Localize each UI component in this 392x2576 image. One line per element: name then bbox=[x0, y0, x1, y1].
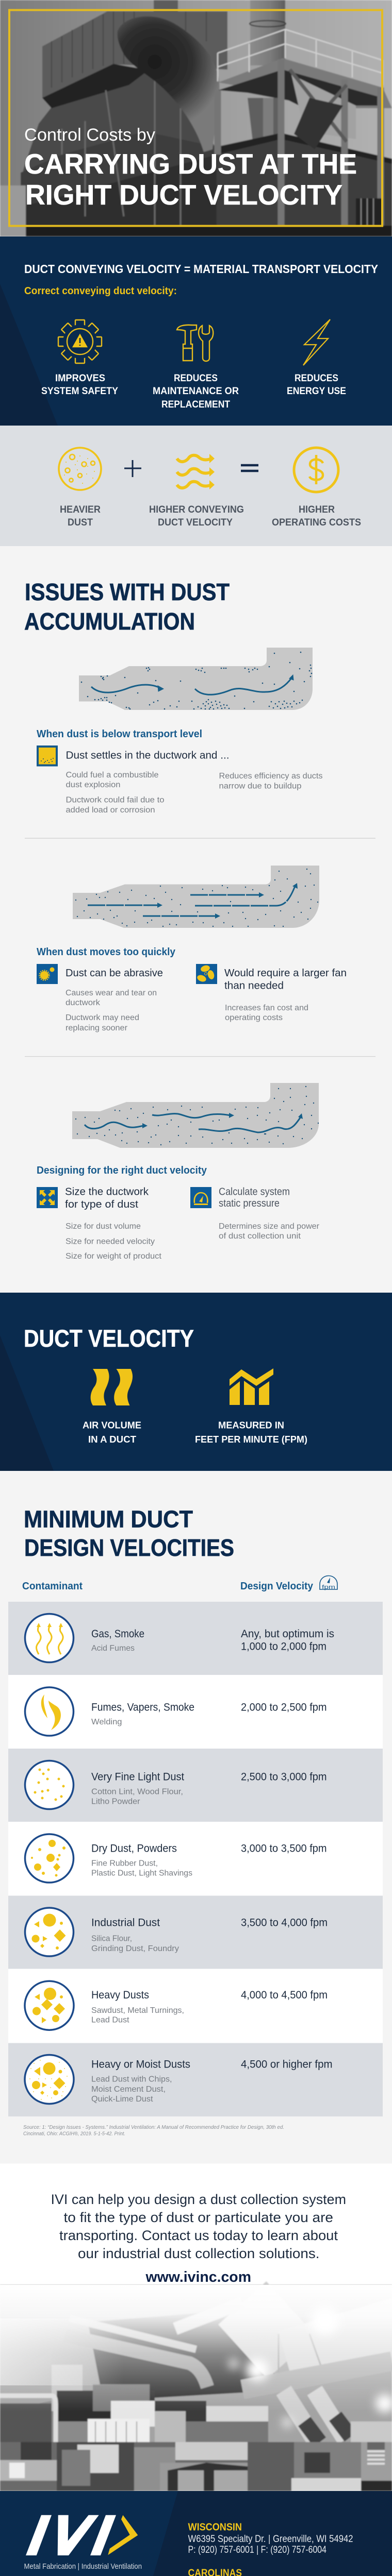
velocity value: 3,500 to 4,000 fpm bbox=[241, 1917, 328, 1929]
icon: lightning bolt bbox=[303, 319, 330, 365]
table row: gas, smoke bbox=[8, 1602, 383, 1675]
label: reduces energy use bbox=[287, 372, 346, 397]
hero yellow frame bbox=[9, 10, 382, 226]
heading: issues with dust accumulation: ISSUES WITH DUST bbox=[25, 579, 230, 605]
label: improves system safety: SYSTEM SAFETY bbox=[41, 385, 118, 397]
text: settled dust consequences left: Could fuel a combustible bbox=[66, 771, 159, 779]
address: Wisconsin: P: (920) 757-6001 | F: (920) 757-6004 bbox=[188, 2545, 326, 2555]
label: air volume: AIR VOLUME bbox=[83, 1420, 141, 1430]
text: examples: Fine Rubber Dust, bbox=[91, 1859, 158, 1868]
text: abrasive consequences: ductwork bbox=[66, 998, 100, 1007]
icon: dry dust bbox=[25, 1834, 73, 1883]
text: determines size: of dust collection unit bbox=[219, 1232, 301, 1241]
icon: rising chart bbox=[230, 1368, 273, 1405]
heading: duct velocity: DUCT VELOCITY bbox=[24, 1325, 194, 1352]
text: dust can be abrasive: Dust can be abrasive bbox=[66, 968, 163, 979]
heading: minimum duct design velocities bbox=[24, 1505, 234, 1561]
panel: footer bbox=[0, 2491, 392, 2576]
label: reduces maintenance: REPLACEMENT bbox=[161, 399, 230, 410]
subtitle: Control Costs by bbox=[24, 125, 155, 145]
text: examples: Grinding Dust, Foundry bbox=[91, 1944, 179, 1953]
label: higher conveying duct velocity bbox=[149, 504, 244, 528]
label: measured in fpm bbox=[195, 1420, 307, 1445]
address: Wisconsin: WISCONSIN bbox=[188, 2521, 242, 2533]
footer photo: factory ductwork bbox=[0, 2285, 392, 2491]
text: fan consequences: Increases fan cost and bbox=[225, 1004, 308, 1012]
panel: white call to action background bbox=[0, 2164, 392, 2287]
text: larger fan: Would require a larger fan bbox=[224, 968, 347, 979]
text: settled dust consequences right: Reduces efficiency as ducts bbox=[219, 772, 323, 781]
hero title bbox=[24, 125, 357, 211]
label: measured in fpm: FEET PER MINUTE (FPM) bbox=[195, 1434, 307, 1445]
label: air volume: IN A DUCT bbox=[88, 1434, 137, 1445]
text: dry dust, powders: Dry Dust, Powders bbox=[91, 1842, 177, 1855]
velocity value: 3,000 to 3,500 fpm bbox=[241, 1842, 327, 1855]
text: size the ductwork: for type of dust bbox=[65, 1199, 138, 1210]
table row: industrial dust bbox=[8, 1896, 383, 1969]
hero photo: baghouse dust collector bbox=[0, 0, 392, 236]
text: examples: Silica Flour, bbox=[91, 1934, 132, 1943]
call to action text: IVI can help you design a dust collection system bbox=[51, 2192, 346, 2207]
icon: moist dust bbox=[25, 2055, 74, 2104]
label: reduces energy use: ENERGY USE bbox=[287, 385, 346, 397]
text: heavy or moist dusts: Heavy or Moist Dusts bbox=[91, 2059, 190, 2070]
text: settled dust consequences left bbox=[66, 771, 164, 815]
icon: expand arrows bbox=[37, 1187, 58, 1208]
text: abrasive consequences: Causes wear and tear on bbox=[66, 989, 157, 997]
label: reduces maintenance: REDUCES bbox=[174, 372, 218, 384]
text: examples: Lead Dust with Chips, bbox=[91, 2075, 172, 2083]
velocity value: 4,000 to 4,500 fpm bbox=[241, 1989, 328, 2001]
subheading: moves too quickly: When dust moves too quickly bbox=[37, 946, 176, 958]
text: calculate system static pressure: static pressure bbox=[219, 1198, 280, 1209]
heading: issues with dust accumulation: ACCUMULATION bbox=[24, 608, 195, 635]
text: size the ductwork bbox=[65, 1186, 149, 1210]
icon: industrial dust bbox=[25, 1908, 73, 1956]
title line 2: RIGHT DUCT VELOCITY bbox=[25, 179, 342, 211]
heading: issues with dust accumulation bbox=[24, 579, 230, 635]
plus sign bbox=[124, 460, 141, 477]
text: acid fumes: Acid Fumes bbox=[91, 1644, 135, 1653]
icon: pressure gauge bbox=[190, 1187, 211, 1208]
icon: settled dust bbox=[38, 747, 57, 766]
subheading: right duct velocity: Designing for the right duct velocity bbox=[37, 1164, 207, 1176]
text: fumes, vapers, smoke: Fumes, Vapers, Smoke bbox=[91, 1701, 194, 1714]
label: higher operating costs: HIGHER bbox=[299, 504, 335, 515]
panel: heavier dust equation bbox=[0, 426, 392, 546]
call to action text: to fit the type of dust or particulate you are bbox=[64, 2210, 333, 2225]
text: examples: Litho Powder bbox=[91, 1797, 140, 1806]
text: abrasive consequences: Ductwork may need bbox=[66, 1013, 139, 1022]
subheading: below transport level: When dust is below transport level bbox=[37, 728, 202, 740]
label: heavier dust bbox=[60, 504, 101, 528]
diagram: duct with right velocity bbox=[72, 1083, 319, 1148]
subheading: Correct conveying duct velocity: bbox=[24, 285, 177, 297]
text: examples: Cotton Lint, Wood Flour, bbox=[91, 1788, 183, 1796]
text: determines size: Determines size and power bbox=[219, 1222, 319, 1231]
text: heavy dusts: Heavy Dusts bbox=[91, 1989, 149, 2001]
source note: Cincinnati, Ohio: ACGIH®, 2019. 5-1-5-42. Print. bbox=[23, 2131, 125, 2137]
text: sizing list: Size for needed velocity bbox=[66, 1238, 155, 1246]
text: settled dust consequences right: narrow due to buildup bbox=[219, 782, 301, 790]
text: size the ductwork: Size the ductwork bbox=[65, 1186, 149, 1197]
label: reduces energy use: REDUCES bbox=[295, 372, 338, 384]
velocity value: 2,000 to 2,500 fpm bbox=[241, 1701, 327, 1714]
text: examples bbox=[91, 2006, 184, 2025]
icon: wavy arrows bbox=[177, 454, 215, 489]
text: determines size bbox=[219, 1222, 319, 1241]
label: heavier dust: HEAVIER bbox=[60, 504, 101, 515]
icon: fan bbox=[196, 964, 217, 984]
table header: design velocity: Design Velocity bbox=[240, 1581, 314, 1592]
icon: air bands bbox=[91, 1369, 133, 1405]
heading: minimum duct design velocities: DESIGN VELOCITIES bbox=[24, 1534, 234, 1561]
label: heavier dust: DUST bbox=[68, 517, 93, 528]
text: dust settles: Dust settles in the ductwork and ... bbox=[66, 750, 229, 761]
label: higher operating costs: OPERATING COSTS bbox=[272, 517, 361, 528]
label: air volume bbox=[83, 1420, 141, 1445]
icon: fume wisp bbox=[25, 1687, 73, 1736]
text: sizing list bbox=[66, 1222, 162, 1261]
text: settled dust consequences right bbox=[219, 772, 323, 790]
text: examples bbox=[91, 1788, 183, 1806]
label: reduces maintenance bbox=[153, 372, 239, 410]
text: examples: Sawdust, Metal Turnings, bbox=[91, 2006, 184, 2015]
logo: IVI bbox=[26, 2515, 138, 2555]
text: examples bbox=[91, 1934, 179, 1953]
source note bbox=[23, 2124, 284, 2137]
text: examples: Plastic Dust, Light Shavings bbox=[91, 1869, 192, 1877]
label: reduces maintenance: MAINTENANCE OR bbox=[153, 385, 239, 397]
diagram: duct with settling dust bbox=[79, 648, 313, 710]
velocity value bbox=[241, 1628, 334, 1653]
text: calculate system static pressure: Calculate system bbox=[219, 1186, 290, 1197]
icon: gear with warning bbox=[58, 320, 102, 363]
label: improves system safety: IMPROVES bbox=[55, 372, 105, 384]
text: very fine light dust: Very Fine Light Dust bbox=[91, 1771, 184, 1783]
text: examples: Quick-Lime Dust bbox=[91, 2095, 153, 2104]
text: welding: Welding bbox=[91, 1718, 122, 1726]
table row: dry dust, powders bbox=[8, 1822, 383, 1896]
icon: fine dust bbox=[25, 1761, 73, 1809]
text: examples bbox=[91, 2075, 172, 2104]
velocity value: 2,500 to 3,000 fpm bbox=[241, 1771, 327, 1783]
text: larger fan bbox=[224, 968, 347, 991]
text: fan consequences bbox=[225, 1004, 308, 1022]
logo tagline: Metal Fabrication | Industrial Ventilation bbox=[24, 2563, 142, 2571]
text: larger fan: than needed bbox=[224, 980, 284, 991]
panel: conveying velocity bbox=[0, 236, 392, 426]
label: higher operating costs bbox=[272, 504, 361, 528]
text: examples bbox=[91, 1859, 192, 1877]
velocity value: 4,500 or higher fpm bbox=[241, 2059, 332, 2070]
title line 1: CARRYING DUST AT THE bbox=[24, 148, 357, 180]
text: examples: Moist Cement Dust, bbox=[91, 2085, 166, 2094]
diagram: duct with fast dust bbox=[73, 866, 319, 928]
label: improves system safety bbox=[41, 372, 118, 397]
website address: www.ivinc.com bbox=[145, 2269, 251, 2285]
velocity value: Any, but optimum is bbox=[241, 1628, 334, 1640]
equals sign bbox=[241, 465, 258, 471]
call to action text: transporting. Contact us today to learn about bbox=[59, 2228, 338, 2243]
text: sizing list: Size for weight of product bbox=[66, 1252, 162, 1261]
table row: very fine light dust bbox=[8, 1749, 383, 1822]
icon: dollar coin bbox=[294, 448, 338, 492]
text: settled dust consequences left: added load or corrosion bbox=[66, 806, 155, 815]
table row: heavy dusts bbox=[8, 1969, 383, 2043]
call to action text: our industrial dust collection solutions. bbox=[78, 2246, 320, 2261]
call to action text bbox=[51, 2192, 346, 2261]
text: industrial dust: Industrial Dust bbox=[91, 1917, 160, 1929]
text: sizing list: Size for dust volume bbox=[66, 1222, 141, 1231]
table row: heavy or moist dusts bbox=[8, 2043, 383, 2116]
text: abrasive consequences bbox=[66, 989, 157, 1032]
heading: minimum duct design velocities: MINIMUM DUCT bbox=[24, 1505, 193, 1532]
text: gas, smoke: Gas, Smoke bbox=[91, 1628, 144, 1640]
text: settled dust consequences left: dust explosion bbox=[66, 781, 121, 789]
velocity value: 1,000 to 2,000 fpm bbox=[241, 1640, 326, 1653]
label: higher conveying duct velocity: HIGHER CONVEYING bbox=[149, 504, 244, 515]
text: examples: Lead Dust bbox=[91, 2015, 129, 2025]
icon: heavy dust bbox=[25, 1981, 74, 2030]
icon: heavier dust bbox=[59, 448, 101, 490]
icon: hammer and wrench bbox=[177, 325, 213, 361]
panel: duct velocity bbox=[0, 1293, 392, 1471]
table header: contaminant: Contaminant bbox=[22, 1581, 83, 1592]
source note: Source: 1: “Design Issues - Systems.” Industrial Ventilation: A Manual of Recommended Practice for Design, 30th ed. bbox=[23, 2124, 284, 2130]
text: abrasive consequences: replacing sooner bbox=[66, 1024, 127, 1032]
text: calculate system static pressure bbox=[219, 1186, 290, 1209]
icon: fpm gauge: fpm bbox=[322, 1584, 335, 1590]
icon: abrasive dust bbox=[37, 964, 58, 984]
text: fan consequences: operating costs bbox=[225, 1013, 283, 1022]
address: Wisconsin bbox=[188, 2521, 353, 2555]
label: higher conveying duct velocity: DUCT VELOCITY bbox=[158, 517, 233, 528]
label: measured in fpm: MEASURED IN bbox=[218, 1420, 284, 1430]
address: Wisconsin: W6395 Specialty Dr. | Greenville, WI 54942 bbox=[188, 2534, 353, 2545]
icon: rising gas bbox=[25, 1614, 73, 1662]
table row: fumes, vapers, smoke bbox=[8, 1675, 383, 1749]
icon: fpm gauge bbox=[320, 1575, 337, 1590]
text: settled dust consequences left: Ductwork could fail due to bbox=[66, 795, 164, 805]
